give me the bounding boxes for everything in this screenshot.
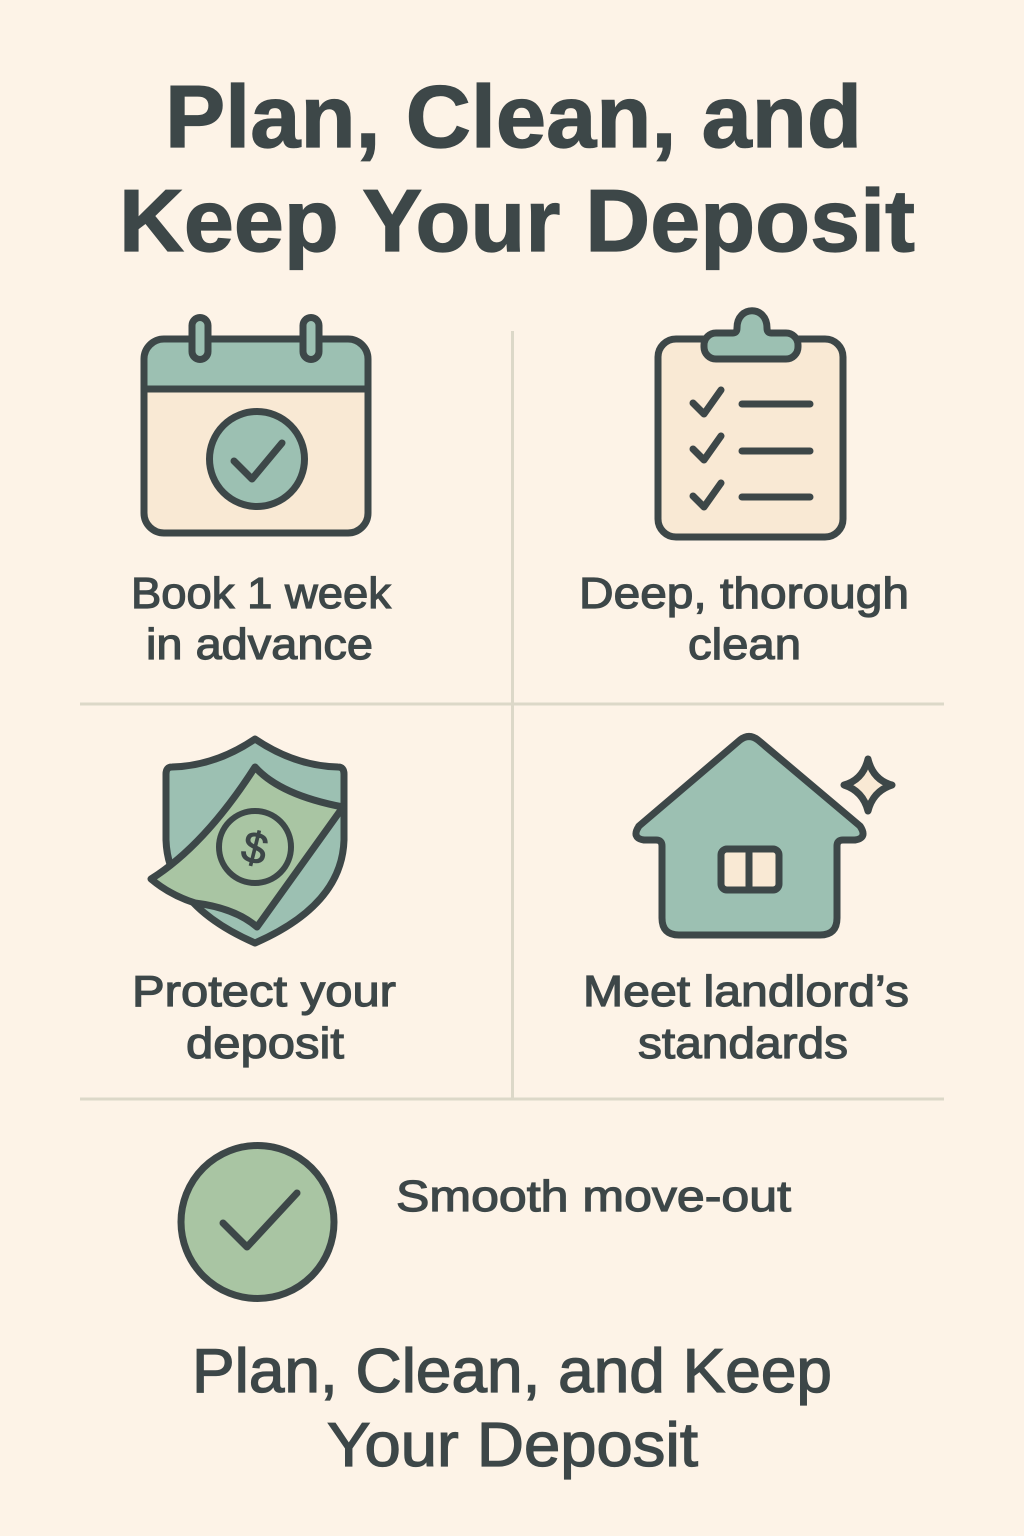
panel: protect deposit xyxy=(132,739,396,1068)
footer heading: Your Deposit xyxy=(327,1411,698,1480)
label: meet landlord's standards xyxy=(583,967,909,1068)
icon: check circle xyxy=(181,1146,334,1298)
footer heading: Plan, Clean, and Keep xyxy=(192,1337,832,1406)
label: deep, thorough clean: Deep, thorough xyxy=(579,569,909,618)
label: protect your deposit xyxy=(132,967,396,1068)
icon: house with sparkle xyxy=(636,736,892,935)
title xyxy=(119,67,915,270)
panel: deep clean xyxy=(579,311,909,669)
panel: book in advance xyxy=(131,318,392,669)
label: deep, thorough clean xyxy=(579,569,909,669)
label: protect your deposit: deposit xyxy=(186,1019,344,1068)
label: deep, thorough clean: clean xyxy=(688,620,801,669)
label: book 1 week in advance: Book 1 week xyxy=(131,569,392,618)
label: meet landlord's standards: Meet landlord’s xyxy=(583,967,909,1016)
icon: shield with banknote: $ xyxy=(237,822,272,875)
footer heading xyxy=(192,1337,832,1480)
panel: smooth move-out xyxy=(181,1146,791,1298)
label: meet landlord's standards: standards xyxy=(638,1019,848,1068)
label: book 1 week in advance xyxy=(131,569,392,669)
icon: calendar with check xyxy=(144,318,368,533)
icon: clipboard checklist xyxy=(658,311,843,537)
label: smooth move-out: Smooth move-out xyxy=(396,1172,791,1221)
icon: shield with banknote xyxy=(151,739,344,943)
label: book 1 week in advance: in advance xyxy=(146,620,373,669)
label: protect your deposit: Protect your xyxy=(132,967,396,1016)
title: Plan, Clean, and xyxy=(165,67,862,166)
panel: landlord standards xyxy=(583,736,909,1068)
title: Keep Your Deposit xyxy=(119,171,915,270)
